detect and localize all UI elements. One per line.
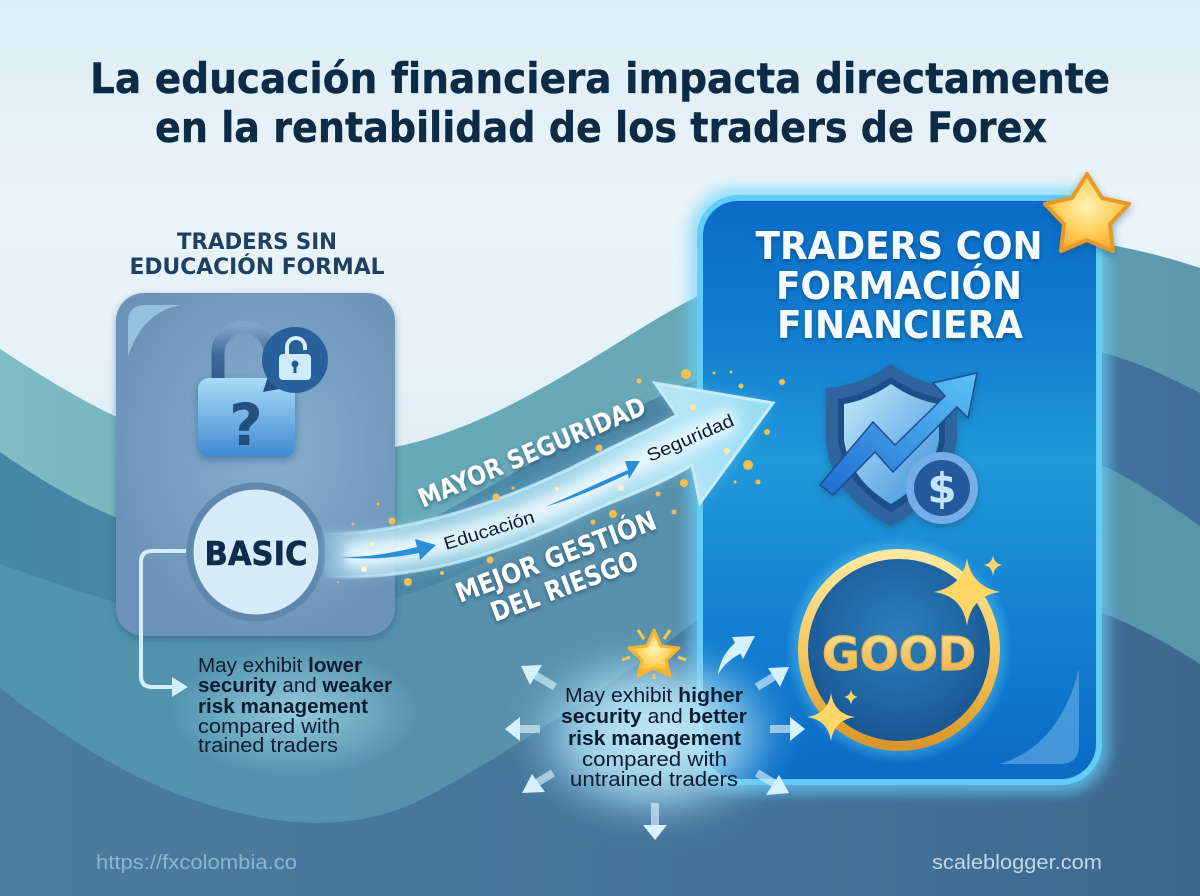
text: basic description: trained traders <box>198 735 338 757</box>
footer: source left: https://fxcolombia.co <box>96 852 297 874</box>
icon: gold star <box>1045 174 1129 251</box>
arrow: educación to seguridad <box>325 383 773 577</box>
icon: shield with rising arrow and dollar <box>820 364 978 526</box>
radial arrows <box>505 636 805 840</box>
icon: padlock with question mark: ? <box>229 391 263 459</box>
panel: traders con formación <box>688 186 1110 794</box>
badge: good: GOOD <box>822 627 976 681</box>
text: risk management <box>568 728 741 750</box>
text: basic description: compared with <box>198 716 340 738</box>
text: untrained traders <box>570 769 738 791</box>
glow behind basic description <box>170 647 420 777</box>
label: mejor gestión del riesgo: DEL RIESGO <box>487 545 643 629</box>
arrow: educación to seguridad: Seguridad <box>644 410 737 466</box>
label: mejor gestión del riesgo: MEJOR GESTIÓN <box>451 505 661 610</box>
footer: source right: scaleblogger.com <box>932 852 1102 874</box>
icon: padlock with question mark <box>198 327 328 459</box>
heading: traders con formación financiera: FORMACIÓN <box>776 264 1022 308</box>
text <box>561 685 747 791</box>
connector arrow <box>141 551 188 697</box>
heading: traders con formación financiera: TRADERS CON <box>756 224 1042 268</box>
heading: traders sin educación formal: EDUCACIÓN FORMAL <box>130 254 384 280</box>
badge: basic <box>190 486 322 618</box>
arrow: educación to seguridad: Educación <box>441 507 537 554</box>
small inner arrow <box>340 539 436 560</box>
text: compared with <box>582 749 727 771</box>
badge: basic: BASIC <box>204 534 308 573</box>
label: mayor seguridad: MAYOR SEGURIDAD <box>414 392 650 514</box>
particles <box>337 369 785 586</box>
text: basic description: risk management <box>198 696 368 718</box>
badge: good <box>785 536 1013 764</box>
icon: small star <box>622 630 686 679</box>
title: La educación financiera impacta directamente <box>90 54 1110 103</box>
panel: traders sin educación <box>116 293 395 636</box>
icon: shield with rising arrow and dollar: $ <box>927 464 957 513</box>
heading: traders sin educación formal: TRADERS SIN <box>177 230 337 255</box>
text: May exhibit higher <box>565 685 743 707</box>
heading: traders con formación financiera <box>756 224 1042 347</box>
small inner arrow two <box>545 461 640 507</box>
text: basic description: security and weaker <box>198 675 392 697</box>
icon: sparkles <box>807 555 1003 741</box>
heading: traders sin educación formal <box>130 230 384 280</box>
heading: traders con formación financiera: FINANCIERA <box>777 303 1024 347</box>
title <box>90 54 1110 152</box>
callout: good description <box>505 630 805 840</box>
text: basic description: May exhibit lower <box>198 655 362 677</box>
title: en la rentabilidad de los traders de Forex <box>155 103 1047 152</box>
text: basic description <box>198 655 392 757</box>
text: security and better <box>561 706 747 728</box>
